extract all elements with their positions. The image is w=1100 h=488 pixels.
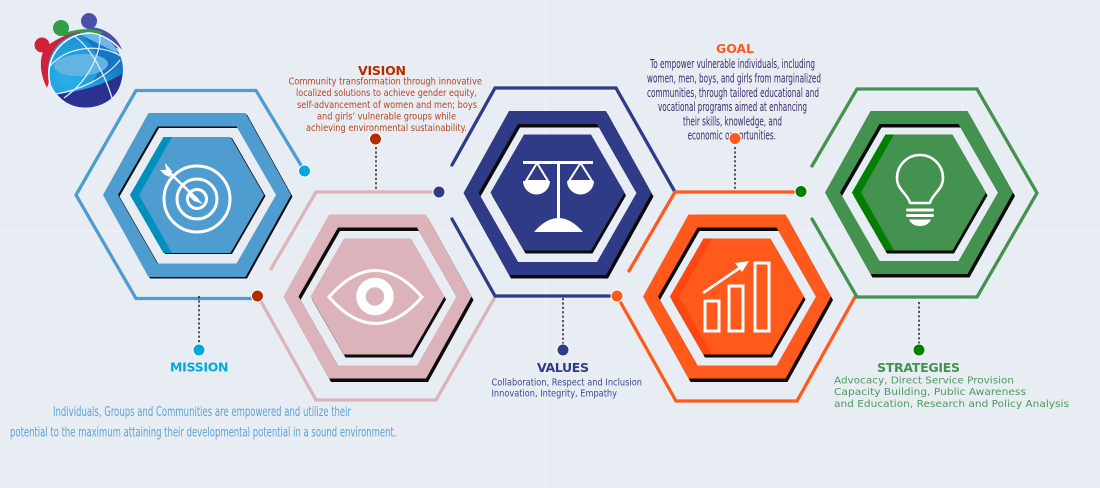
text block: goal statement: To empower vulnerable individuals, including (649, 57, 815, 71)
text block: mission statement: potential to the maximum attaining their developmental potential in a sound environment. (10, 424, 396, 440)
mission outer outline (76, 90, 304, 298)
text block: vision statement: localized solutions to achieve gender equity, (296, 88, 477, 99)
mission ring (103, 113, 292, 278)
panel: vision hexagon (258, 192, 495, 400)
text block: goal statement (647, 57, 821, 142)
logo: globe with people (34, 13, 123, 108)
heading: values: VALUES (537, 360, 589, 375)
text block: strategies list: Advocacy, Direct Service Provision (834, 376, 1014, 386)
strategies outer outline (812, 89, 1037, 297)
goal ring (643, 214, 833, 382)
connector: vision dotted line (375, 147, 377, 191)
icon: balance scales (523, 161, 594, 232)
connector: values dotted line (562, 298, 564, 345)
text block: vision statement: self-advancement of women and men; boys (297, 100, 477, 111)
text block: vision statement: achieving environmental sustainability. (306, 123, 467, 134)
icon: light bulb (897, 155, 943, 226)
panel: strategies hexagon (812, 89, 1037, 297)
text block: goal statement: their skills, knowledge, and (683, 114, 782, 128)
text block: values list (492, 378, 642, 400)
text block: mission statement: Individuals, Groups and Communities are empowered and utilize their (53, 404, 351, 420)
text block: goal statement: economic opportunities. (688, 128, 776, 142)
panel: mission hexagon (76, 90, 304, 298)
text block: goal statement: communities, through tailored educational and (647, 86, 819, 100)
connector: strategies dotted line (918, 302, 920, 345)
text block: values list: Collaboration, Respect and Inclusion (492, 378, 642, 388)
text block: vision statement: and girls’ vulnerable groups while (317, 112, 456, 122)
heading: strategies: STRATEGIES (877, 360, 960, 375)
text block: goal statement: vocational programs aimed at enhancing (658, 100, 807, 114)
icon: rising bar chart (703, 261, 769, 331)
heading: vision: VISION (358, 63, 406, 78)
heading: mission: MISSION (170, 360, 228, 374)
vision ring (284, 214, 474, 382)
text block: mission statement (10, 404, 396, 440)
text block: strategies list: Capacity Building, Public Awareness (834, 387, 1026, 398)
text block: values list: Innovation, Integrity, Empathy (492, 388, 617, 400)
text block: strategies list (834, 376, 1069, 410)
vision outer outline (258, 192, 495, 400)
text block: strategies list: and Education, Research and Policy Analysis (834, 399, 1069, 410)
panel: values hexagon (452, 88, 675, 296)
values outer outline (452, 88, 675, 296)
connector: mission dotted line (198, 296, 200, 345)
text block: goal statement: women, men, boys, and girls from marginalized (647, 72, 821, 86)
icon: target with arrow (160, 163, 230, 232)
connector dots (193, 132, 925, 356)
connector: goal dotted line (734, 147, 736, 190)
values ring (464, 111, 654, 278)
panel: goal hexagon (617, 192, 855, 401)
text block: vision statement: Community transformation through innovative (288, 76, 482, 88)
text block: vision statement (288, 76, 482, 134)
goal outer outline (617, 192, 855, 401)
icon: eye (329, 270, 422, 324)
heading: goal: GOAL (716, 41, 754, 56)
strategies ring (825, 111, 1015, 278)
